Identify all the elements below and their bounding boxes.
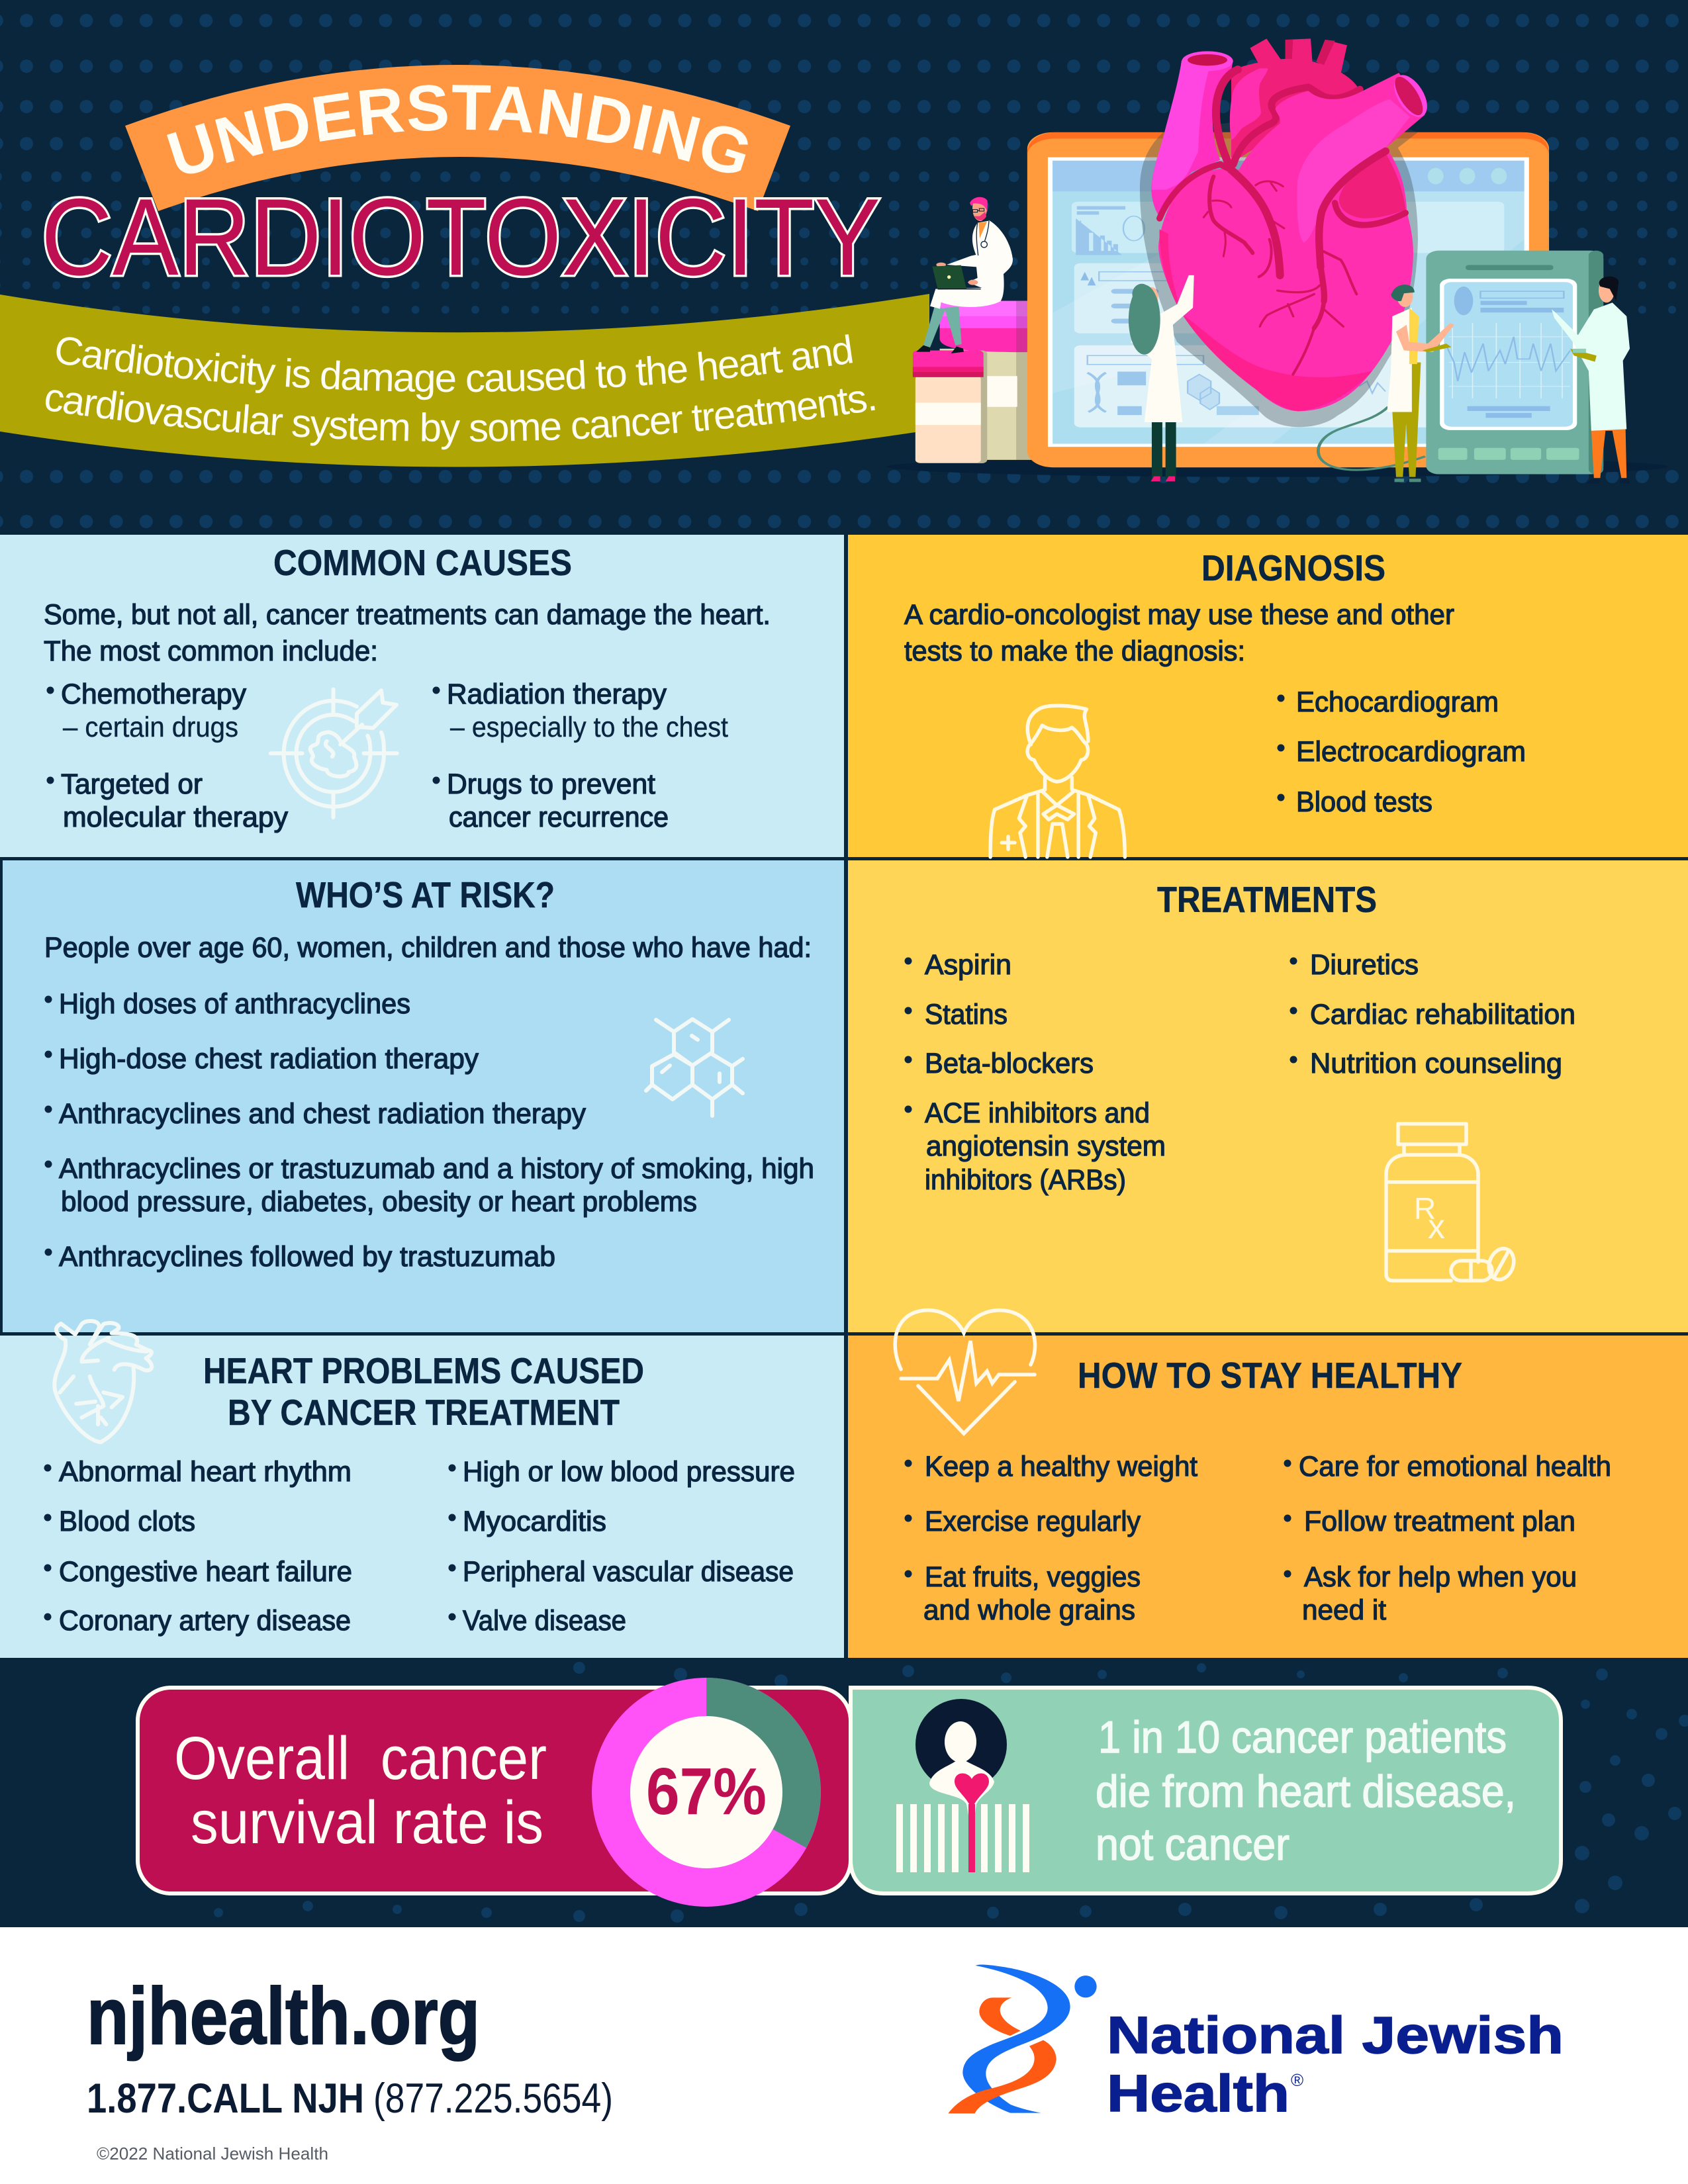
survival text: survival rate is [191, 1789, 543, 1856]
list: risk factors: blood pressure, diabetes, obesity or heart problems [61, 1186, 697, 1218]
survival text: Overall cancer [174, 1725, 547, 1792]
intro text: Some, but not all, cancer treatments can damage the heart. [44, 599, 771, 631]
list: healthy habits right: Follow treatment plan [1304, 1506, 1575, 1537]
icon: target with arrow [271, 690, 397, 817]
list: treatments left: Beta-blockers [925, 1048, 1094, 1079]
list: treatments right [1289, 949, 1575, 1079]
icon: doctor pointing at monitor [1552, 277, 1630, 484]
heading: heart problems: BY CANCER TREATMENT [228, 1392, 620, 1433]
list: healthy habits right: need it [1302, 1594, 1386, 1626]
list: healthy habits left [904, 1451, 1197, 1626]
list: cause types: – especially to the chest [450, 711, 728, 743]
list: cause types: Chemotherapy [61, 678, 246, 710]
list: cause types: Targeted or [61, 768, 203, 800]
footer contact [87, 1971, 613, 2163]
logo: National Jewish Health [948, 1964, 1564, 2122]
header panel [0, 0, 1688, 535]
icon: prescription bottle [1386, 1124, 1518, 1283]
list: problems right: Valve disease [463, 1605, 626, 1637]
statistic text: not cancer [1096, 1819, 1289, 1870]
list: tests [1278, 686, 1526, 818]
statistic text: 1 in 10 cancer patients [1098, 1712, 1507, 1762]
icon: doctor with laptop [916, 197, 1013, 353]
list: problems right: Myocarditis [463, 1506, 606, 1537]
list: problems right [449, 1456, 795, 1637]
panel: common causes [0, 535, 844, 857]
list: problems right: High or low blood pressure [463, 1456, 795, 1488]
intro text: tests to make the diagnosis: [904, 635, 1245, 667]
survival text [174, 1725, 547, 1856]
icon: doctor with long hair [1129, 275, 1194, 481]
heading: heart problems: HEART PROBLEMS CAUSED [203, 1350, 644, 1391]
donut chart: 67% [592, 1678, 821, 1907]
list: healthy habits right: Care for emotional health [1299, 1451, 1611, 1482]
list: treatments left: inhibitors (ARBs) [925, 1164, 1126, 1196]
icon: prescription bottle: x [1428, 1208, 1445, 1246]
panel: how to stay healthy [848, 1336, 1688, 1658]
list: treatments left: ACE inhibitors and [925, 1097, 1150, 1129]
icon: helix mark [948, 1964, 1097, 2113]
panel: who's at risk [3, 860, 844, 1332]
statistic text: die from heart disease, [1096, 1766, 1516, 1817]
heading: diagnosis: DIAGNOSIS [1201, 547, 1385, 588]
list: healthy habits left: Eat fruits, veggies [925, 1561, 1141, 1593]
list: problems left [44, 1456, 352, 1637]
intro text: The most common include: [44, 635, 378, 667]
list: healthy habits right: Ask for help when you [1304, 1561, 1577, 1593]
icon: heart outline [54, 1321, 152, 1442]
panel: heart problems [0, 1336, 844, 1658]
list: problems left: Coronary artery disease [59, 1605, 351, 1637]
icon: doctor with yellow scarf [1387, 285, 1454, 482]
list: cause types: Drugs to prevent [447, 768, 655, 800]
list: cause types: Radiation therapy [447, 678, 667, 710]
list: treatments right: Diuretics [1310, 949, 1419, 981]
panel: survival rate [138, 1678, 851, 1907]
list: treatments left [904, 949, 1166, 1196]
list: cause types: cancer recurrence [449, 801, 669, 833]
footer contact: njhealth.org [87, 1971, 480, 2061]
donut chart: 67%: 67% [646, 1754, 767, 1829]
heading: UNDERSTANDING: UNDERSTANDING [167, 85, 748, 173]
list: healthy habits left: Keep a healthy weight [925, 1451, 1197, 1482]
list: risk factors: High doses of anthracyclines [59, 988, 410, 1020]
list: treatments right: Nutrition counseling [1310, 1048, 1562, 1079]
logo: National Jewish Health: ® [1291, 2070, 1303, 2090]
heading: who's at risk: WHO’S AT RISK? [296, 874, 555, 915]
footer contact: 1.877.CALL NJH [87, 2075, 364, 2122]
definition text: cardiovascular system by some cancer treatments. [46, 389, 875, 450]
list: risk factors [45, 988, 814, 1273]
logo: National Jewish Health: Health [1107, 2064, 1289, 2122]
list: problems left: Abnormal heart rhythm [59, 1456, 352, 1488]
list: treatments right: Cardiac rehabilitation [1310, 999, 1575, 1030]
list: risk factors: Anthracyclines or trastuzumab and a history of smoking, high [59, 1153, 814, 1185]
icon: doctor outline [990, 705, 1125, 857]
list: cause types: – certain drugs [63, 711, 238, 743]
footer contact: ©2022 National Jewish Health [97, 2144, 328, 2163]
olive definition banner [0, 294, 929, 467]
list: problems left: Blood clots [59, 1506, 195, 1537]
list: cause types: molecular therapy [63, 801, 288, 833]
list: treatments left: Aspirin [925, 949, 1011, 981]
orange banner [125, 65, 790, 211]
heading: how to stay healthy: HOW TO STAY HEALTHY [1078, 1355, 1462, 1396]
heading: heart problems [203, 1350, 644, 1433]
list: risk factors: Anthracyclines and chest radiation therapy [59, 1098, 586, 1130]
icon: heart with EKG line [895, 1310, 1035, 1433]
footer contact: (877.225.5654) [373, 2075, 613, 2122]
list: healthy habits left: Exercise regularly [925, 1506, 1141, 1537]
panel: treatments [848, 860, 1688, 1332]
list: healthy habits right [1284, 1451, 1611, 1626]
list: cause types [46, 678, 728, 833]
illustration: heart, tablet, phone and doctors [887, 38, 1667, 484]
icon: anatomical heart [1140, 38, 1434, 427]
statistic text [1096, 1712, 1516, 1870]
list: risk factors: Anthracyclines followed by trastuzumab [59, 1241, 555, 1273]
separators background [0, 535, 1688, 1658]
bottom stats band [0, 1658, 1688, 1927]
heading: common causes: COMMON CAUSES [273, 542, 572, 583]
list: problems left: Congestive heart failure [59, 1556, 352, 1588]
icon: person with heart and bars [896, 1699, 1029, 1872]
icon: molecule [646, 1019, 743, 1116]
intro text: A cardio-oncologist may use these and other [904, 599, 1454, 631]
list: healthy habits left: and whole grains [923, 1594, 1135, 1626]
logo: National Jewish Health: National Jewish [1107, 2005, 1564, 2064]
cable [1318, 407, 1425, 470]
list: tests: Blood tests [1296, 786, 1432, 818]
intro text [904, 599, 1454, 667]
list: risk factors: High-dose chest radiation therapy [59, 1043, 479, 1075]
icon: phone monitor [1426, 251, 1603, 475]
intro text: People over age 60, women, children and those who have had: [44, 932, 812, 964]
list: problems right: Peripheral vascular disease [463, 1556, 794, 1588]
icon: prescription bottle: R [1414, 1191, 1436, 1226]
stacked boxes and tablet [887, 132, 1667, 477]
list: treatments left: angiotensin system [926, 1130, 1166, 1162]
people and phone [1129, 251, 1630, 484]
heading: treatments: TREATMENTS [1157, 879, 1377, 920]
list: tests: Electrocardiogram [1296, 736, 1526, 768]
definition text [46, 334, 875, 450]
panel: diagnosis [848, 535, 1688, 857]
definition text: Cardiotoxicity is damage caused to the heart and [56, 334, 853, 400]
title: CARDIOTOXICITY: CARDIOTOXICITY [41, 176, 880, 298]
list: tests: Echocardiogram [1296, 686, 1499, 718]
list: treatments left: Statins [925, 999, 1008, 1030]
intro text [44, 599, 771, 667]
panel: 1 in 10 [851, 1688, 1561, 1893]
